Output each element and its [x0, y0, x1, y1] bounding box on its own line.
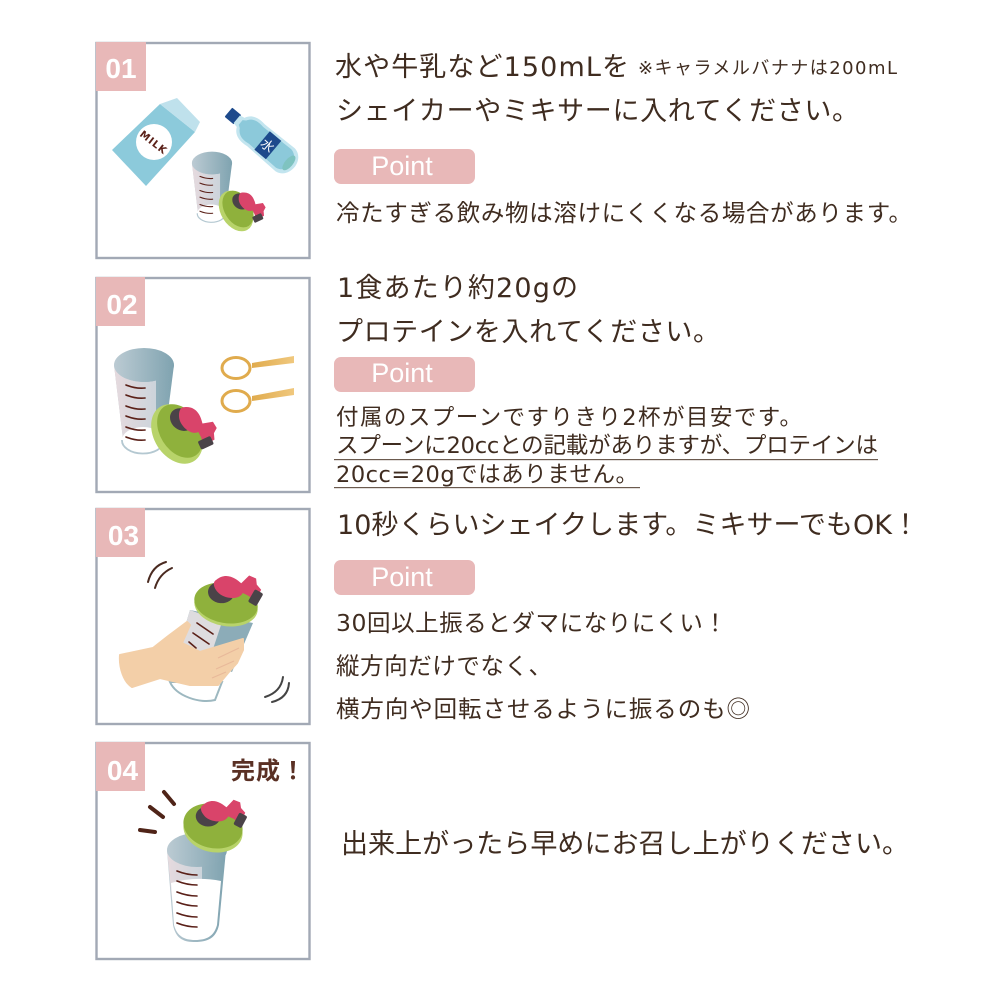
text: point 1: 冷たすぎる飲み物は溶けにくくなる場合があります。: [336, 199, 912, 227]
panel: step 04 illustration: [96, 742, 310, 959]
icon: milk carton: MILK: [137, 129, 169, 157]
panel: step 02 illustration: [96, 277, 310, 492]
text: point 2 line 3: 20cc=20gではありません。: [336, 462, 638, 488]
badge: 01: 01: [105, 53, 137, 84]
icon: sparkle lines: [140, 792, 174, 832]
badge: 01: [96, 42, 146, 91]
heading: step 02 line 1: 1食あたり約20gの: [337, 273, 578, 304]
icon: shaker lid: [191, 572, 265, 631]
icon: shaker lid: [179, 797, 248, 859]
icon: shaker with drink: [167, 833, 227, 942]
label: Point 2: Point: [371, 358, 433, 388]
icon: milk carton: [112, 98, 200, 186]
heading: complete: 完成！: [231, 751, 305, 786]
icon: spoon bottom: [222, 388, 294, 412]
icon: shaker lid: [141, 395, 225, 473]
text: point 2 line 2: スプーンに20ccとの記載がありますが、プロテインは: [336, 433, 878, 459]
heading: step 04: 出来上がったら早めにお召し上がりください。: [341, 829, 909, 860]
badge: 04: [96, 742, 145, 791]
label: Point 1: [334, 149, 475, 184]
heading: step 01 line 1: 水や牛乳など150mLを: [335, 52, 629, 83]
icon: spoon top: [222, 356, 294, 378]
icon: shaker lid: [212, 184, 271, 238]
icon: shaker cup: [114, 348, 174, 454]
label: Point 3: [334, 560, 475, 595]
label: Point 2: [334, 357, 475, 392]
label: Point 1: Point: [371, 151, 433, 181]
icon: water bottle: [219, 101, 304, 179]
heading: step 01 line 2: シェイカーやミキサーに入れてください。: [336, 96, 859, 127]
panel: step 03 illustration: [96, 508, 310, 724]
badge: 04: 04: [107, 755, 138, 786]
badge: 03: [96, 508, 145, 557]
heading: step 02 line 2: プロテインを入れてください。: [336, 317, 720, 348]
icon: water bottle: 水: [257, 136, 277, 156]
heading: step 03: 10秒くらいシェイクします。ミキサーでもOK！: [337, 510, 919, 541]
panel: step 01 illustration: [96, 42, 310, 258]
icon: hand: [120, 622, 243, 687]
note: caramel banana: ※キャラメルバナナは200mL: [638, 58, 897, 79]
icon: shaken bottle: [170, 610, 253, 701]
text: point 3 line 3: 横方向や回転させるように振るのも◎: [336, 690, 750, 724]
text: point 2 line 1: 付属のスプーンですりきり2杯が目安です。: [336, 405, 802, 431]
badge: 02: 02: [106, 289, 138, 320]
badge: 03: 03: [108, 520, 139, 551]
text: point 3 line 1: 30回以上振るとダマになりにくい！: [336, 609, 727, 637]
text: point 3 line 2: 縦方向だけでなく、: [336, 652, 552, 680]
label: Point 3: Point: [371, 562, 433, 592]
icon: shaker cup: [192, 152, 232, 222]
icon: motion lines bottom: [265, 677, 289, 702]
icon: motion lines top: [148, 562, 172, 588]
badge: 02: [96, 277, 145, 326]
